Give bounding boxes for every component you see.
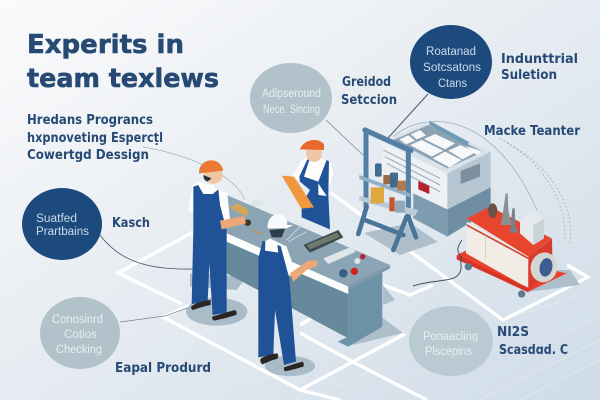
callout circle: Adlpseround: Adlpseround — [262, 88, 321, 100]
callout circle: Adlpseround: Nece. Sincing — [263, 104, 320, 116]
illustration: control cabinet — [382, 121, 491, 237]
callout circle: Roatanad: Roatanad — [426, 46, 476, 58]
callout circle: Conosinrd: Conosinrd — [52, 314, 103, 326]
callout circle: Suatfed: Prartbains — [36, 226, 89, 238]
callout circle: Conosinrd — [40, 297, 120, 369]
label: Macke Teanter: Macke Teanter — [484, 123, 580, 139]
illustration: red machine — [457, 193, 567, 298]
callout circle: Adlpseround — [250, 63, 332, 133]
back worker — [282, 140, 333, 229]
callout circle: Roatanad: Sotcsatons — [423, 62, 481, 74]
power cable — [413, 240, 462, 286]
connector lines — [100, 94, 571, 322]
worker shadows — [186, 273, 315, 376]
callout circle: Suatfed — [22, 188, 102, 260]
title: team texlews — [27, 64, 219, 94]
callout circle: Conosinrd: Cotios — [64, 329, 97, 341]
label: Kasch: Kasch — [112, 215, 150, 231]
label: Greidod Setccion: Greidod — [342, 74, 391, 90]
floor shadows — [353, 223, 580, 345]
worker: orange helmet left — [188, 160, 246, 321]
label: Greidod Setccion — [341, 74, 397, 108]
title: Experits in — [27, 30, 184, 60]
callout circle: Ponaacling: Plscepins — [425, 346, 472, 358]
illustration: parts rack — [358, 130, 418, 250]
illustration: workers at bench — [186, 140, 390, 376]
floor markings — [118, 192, 588, 400]
label: NI2S Scasdad. C — [497, 324, 568, 358]
worker: white helmet front — [258, 214, 317, 371]
callout circle: Ponaacling — [409, 306, 493, 376]
label: Indunttrial Suletion — [501, 51, 578, 83]
label: Greidod Setccion: Setccion — [341, 92, 397, 108]
subtitle text — [27, 112, 163, 163]
callout circle: Roatanad — [410, 25, 492, 99]
label: Indunttrial Suletion: Suletion — [501, 67, 557, 83]
title — [27, 30, 219, 94]
callout circle: Suatfed: Suatfed — [36, 213, 77, 225]
subtitle text: Cowertgd Dessign — [27, 147, 149, 163]
callout circle: Roatanad: Ctans — [438, 78, 467, 90]
callout circle: Conosinrd: Checking — [56, 344, 102, 356]
label: Indunttrial Suletion: Indunttrial — [501, 51, 578, 67]
subtitle text: Hredans Prograncs — [27, 112, 153, 128]
callout circle: Ponaacling: Ponaacling — [423, 331, 478, 343]
subtitle text: hxpnoveting Espercṭl — [27, 130, 163, 146]
label: NI2S Scasdad. C: NI2S — [497, 324, 529, 340]
workbench — [227, 195, 390, 347]
label: NI2S Scasdad. C: Scasdɑd. C — [499, 342, 568, 358]
label: Eapal Produrd: Eapal Produrd — [115, 360, 211, 376]
